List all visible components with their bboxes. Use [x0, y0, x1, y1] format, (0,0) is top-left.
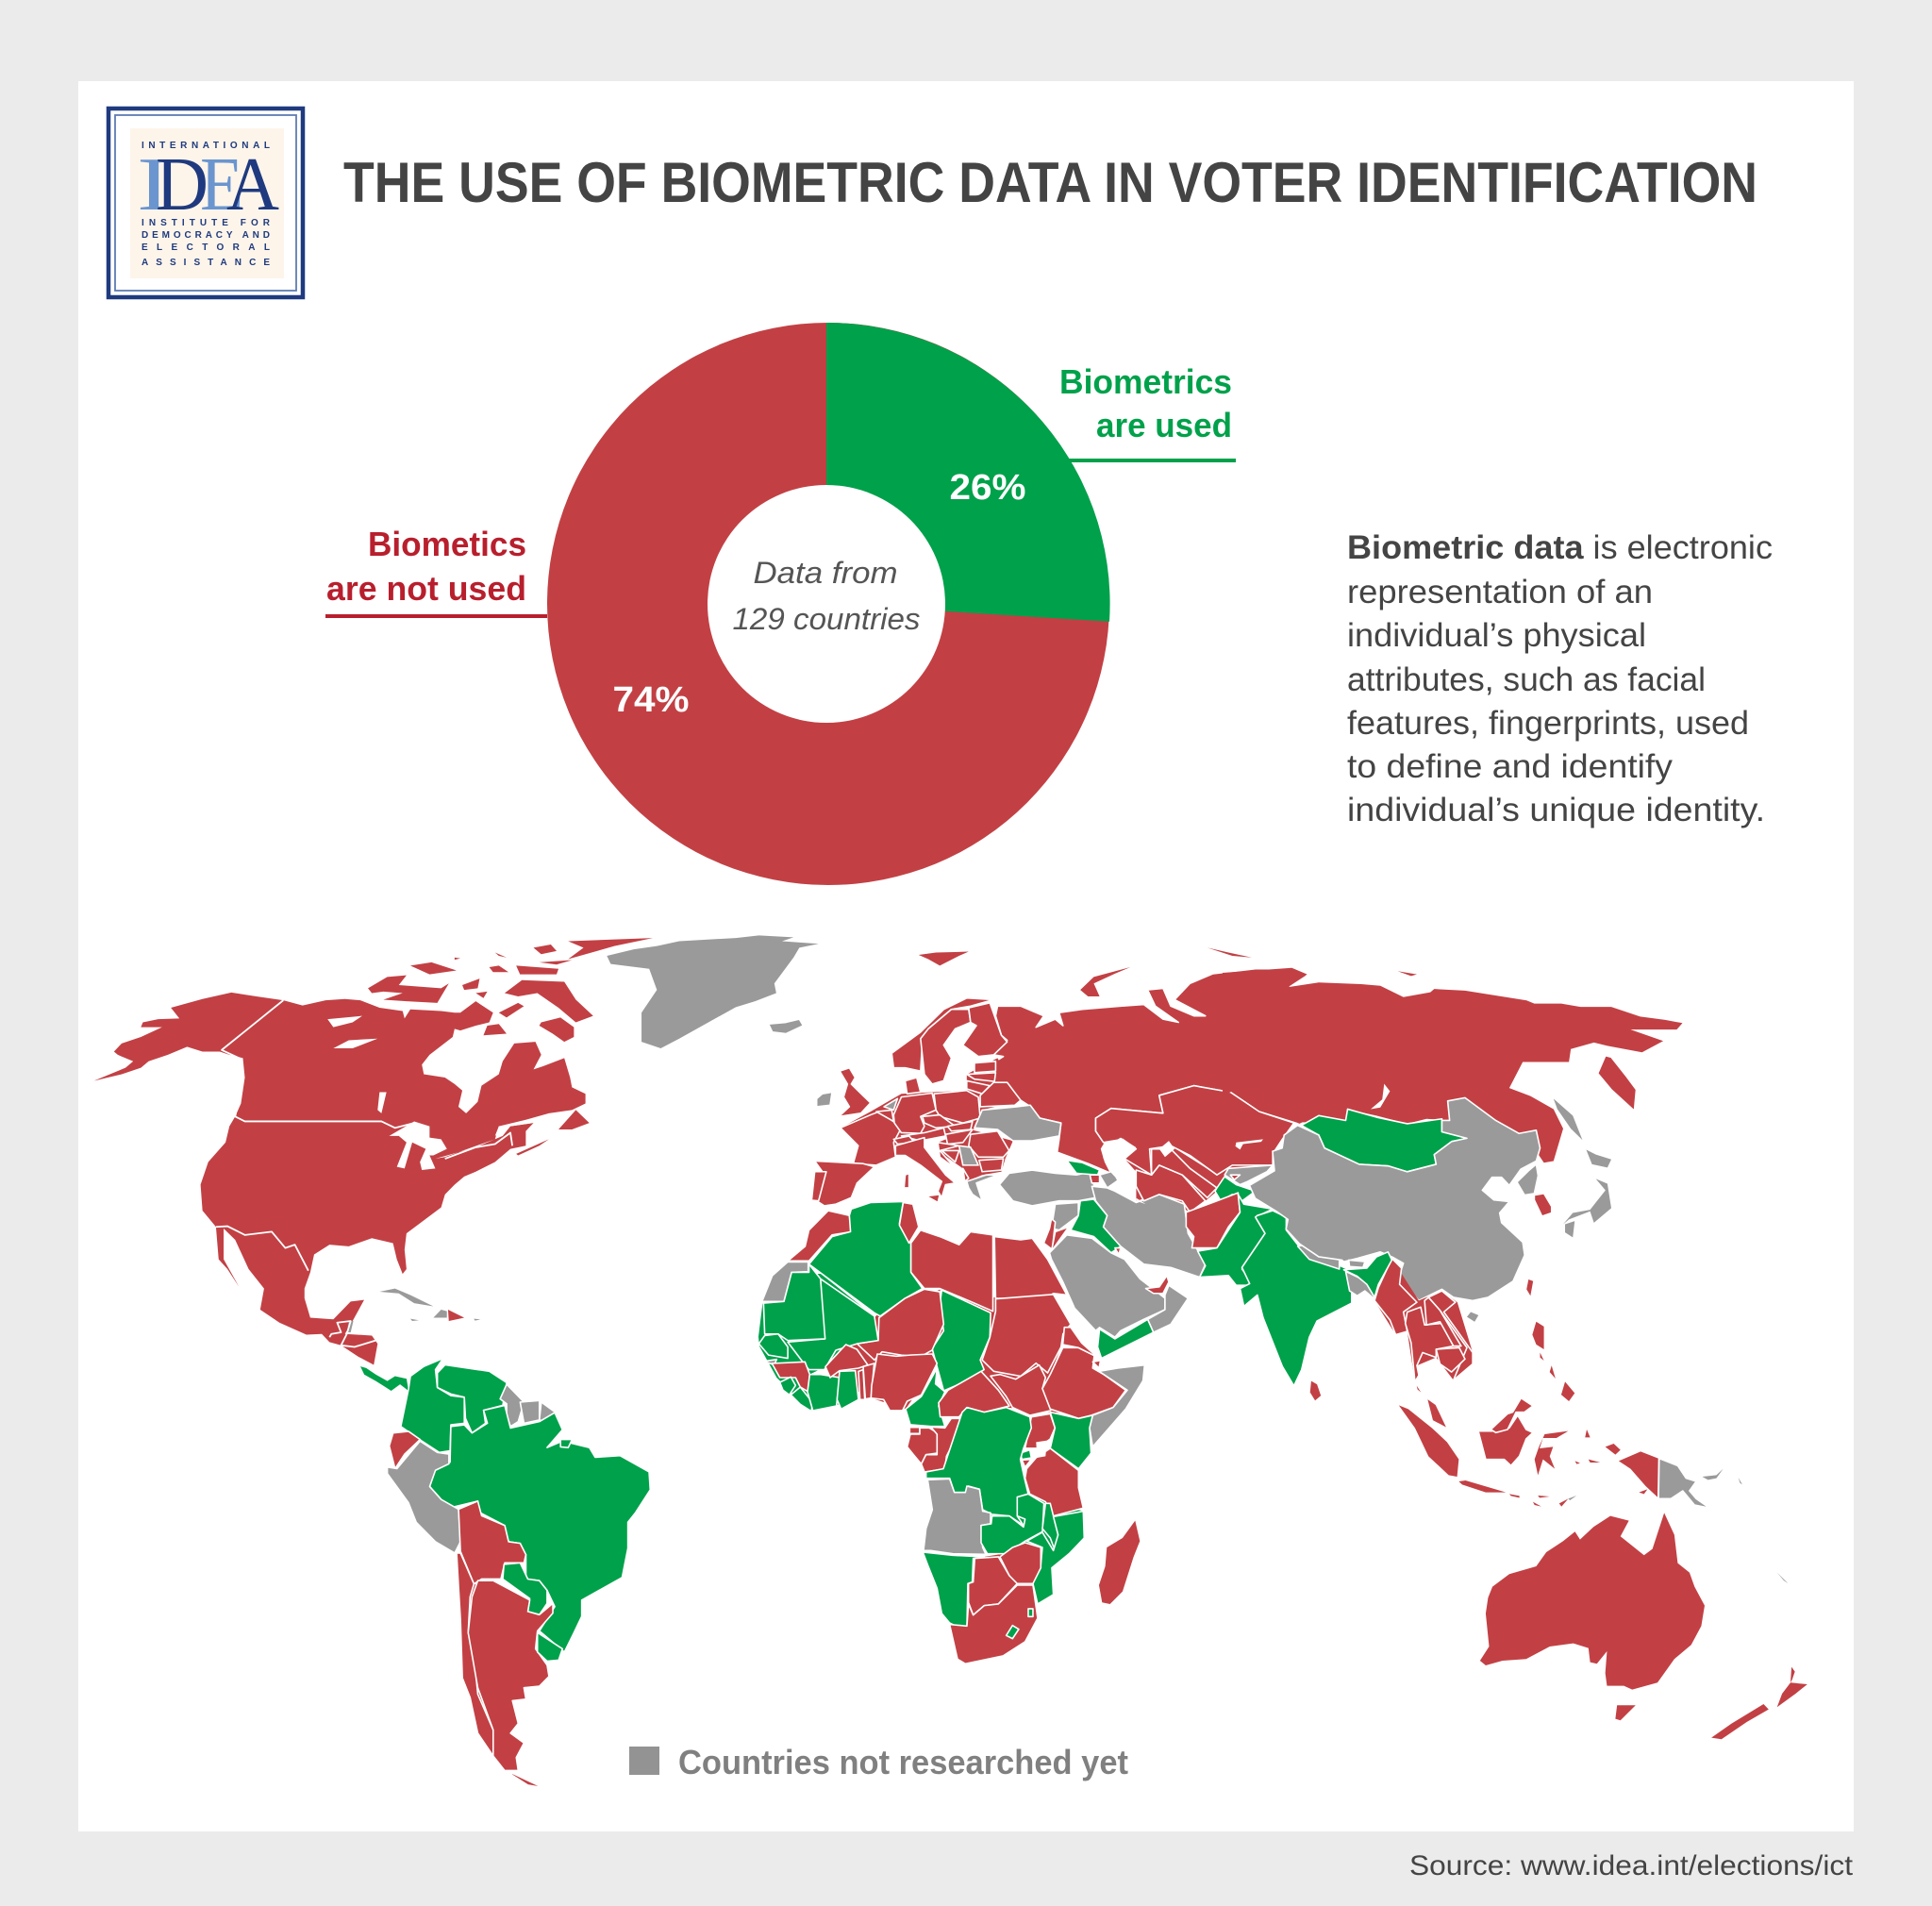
definition text block: to define and identify — [1347, 748, 1674, 785]
world map — [94, 935, 1807, 1788]
donut centre label: 129 countries — [732, 602, 921, 636]
map: east asia — [1223, 968, 1682, 1429]
map: south america — [360, 1359, 650, 1788]
donut centre label — [732, 556, 921, 636]
logo: International IDEA: INTERNATIONAL — [142, 141, 270, 151]
callout: biometics are not used: are not used — [326, 569, 526, 608]
value: 26%: 26% — [949, 468, 1026, 508]
definition text block — [1347, 529, 1773, 828]
logo: International IDEA: E — [200, 143, 243, 226]
callout: biometics are not used: Biometics — [368, 525, 526, 563]
map: africa base layer — [758, 1274, 1125, 1664]
callout: biometrics are used: Biometrics — [1059, 362, 1232, 401]
logo: International IDEA: ASSISTANCE — [142, 258, 270, 268]
map: greenland, europe, russia west, middle east, north africa — [607, 935, 1352, 1400]
logo: International IDEA: A — [226, 143, 279, 226]
value: 74%: 74% — [613, 680, 689, 720]
definition text block: Biometric data is electronic — [1347, 529, 1773, 566]
europe base layer — [841, 1091, 982, 1165]
definition text block: features, fingerprints, used — [1347, 705, 1749, 742]
donut chart — [547, 323, 1110, 885]
southeast asia base layer — [1374, 1259, 1473, 1381]
map: sub-saharan africa — [764, 1328, 1144, 1664]
logo: International IDEA — [108, 109, 303, 297]
north africa — [758, 1201, 1071, 1391]
callout: biometrics are used: are used — [1096, 406, 1232, 444]
map: north america — [94, 938, 653, 1364]
logo: International IDEA: INSTITUTE FOR — [142, 218, 271, 228]
logo: International IDEA: D — [156, 143, 208, 226]
donut centre label: Data from — [753, 556, 898, 590]
logo: International IDEA: I — [137, 143, 171, 226]
map: southeast asia and oceania — [1399, 1398, 1807, 1739]
callout: biometics are not used — [325, 525, 547, 618]
logo: International IDEA: ELECTORAL — [142, 242, 270, 253]
title: THE USE OF BIOMETRIC DATA IN VOTER IDENTIFICATION — [343, 151, 1757, 214]
definition text block: individual’s physical — [1347, 617, 1646, 654]
definition text block: individual’s unique identity. — [1347, 792, 1765, 828]
source line: Source: www.idea.int/elections/ict — [1409, 1850, 1854, 1881]
legend: countries not researched yet: Countries not researched yet — [678, 1743, 1128, 1781]
logo: International IDEA: DEMOCRACY AND — [142, 230, 270, 241]
definition text block: representation of an — [1347, 574, 1653, 610]
callout: biometrics are used — [1059, 362, 1236, 462]
definition text block: attributes, such as facial — [1347, 661, 1706, 698]
